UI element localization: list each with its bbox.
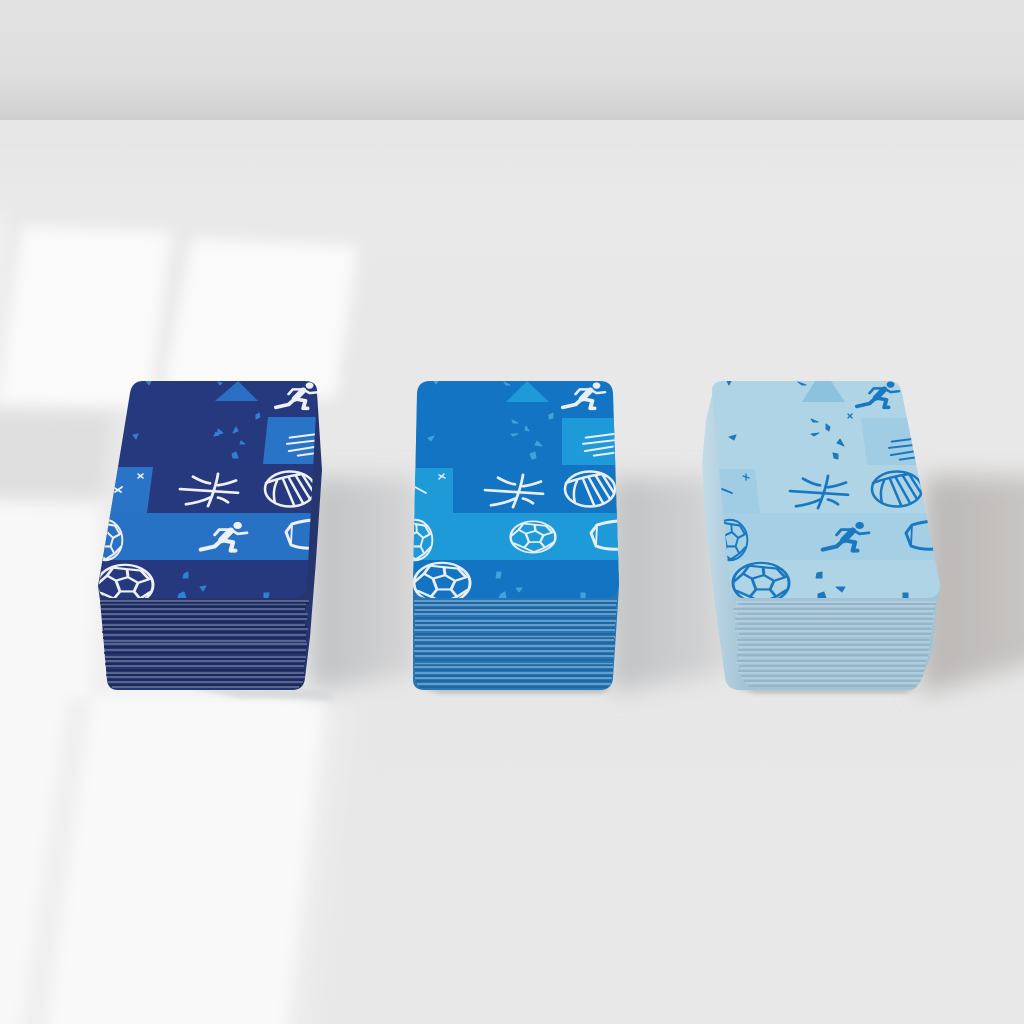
left square [414,468,453,513]
triangle [506,381,549,402]
stack 1 card edge lines [100,601,309,687]
band [405,513,625,560]
stack 2 card edge lines [414,601,617,684]
icons: runners, basketball, volleyball, soccer balls, hexagon [713,381,935,603]
band [95,513,320,560]
right square [263,417,320,464]
band [720,513,942,560]
triangle [215,381,258,401]
stack 3: pale-blue cards [700,375,950,690]
window light patches on table [0,215,358,1024]
icons: runner, basketball, volleyball, soccer balls, hexagon [398,382,620,603]
stack 2 top card [413,381,619,598]
stack 1 side edges [98,393,322,690]
contact shadow wedge under stack 1 [190,688,335,700]
right square [562,418,616,465]
left square [715,469,760,513]
small confetti marks [727,381,908,598]
icons: runners, basketball, volleyball, soccer balls, hexagon [88,382,318,605]
soft shadows cast to the right of the stacks [310,476,1024,695]
triangle [802,381,845,402]
contact shadows under stacks 2 and 3 [420,688,918,693]
shaded band below window light [0,414,110,495]
stack 3 top card [712,381,940,598]
stack 3 card edge lines [733,602,936,683]
small confetti marks [428,381,585,598]
back wall [0,0,1024,120]
right square [861,418,916,465]
stack 2: mid-blue cards [413,381,619,690]
small confetti marks [133,381,269,598]
stack 3 side edges [702,395,940,690]
left square [107,467,153,513]
stack 1 top card [98,381,318,598]
stack 1: navy cards [88,375,325,690]
stack 2 side edges [413,400,619,690]
